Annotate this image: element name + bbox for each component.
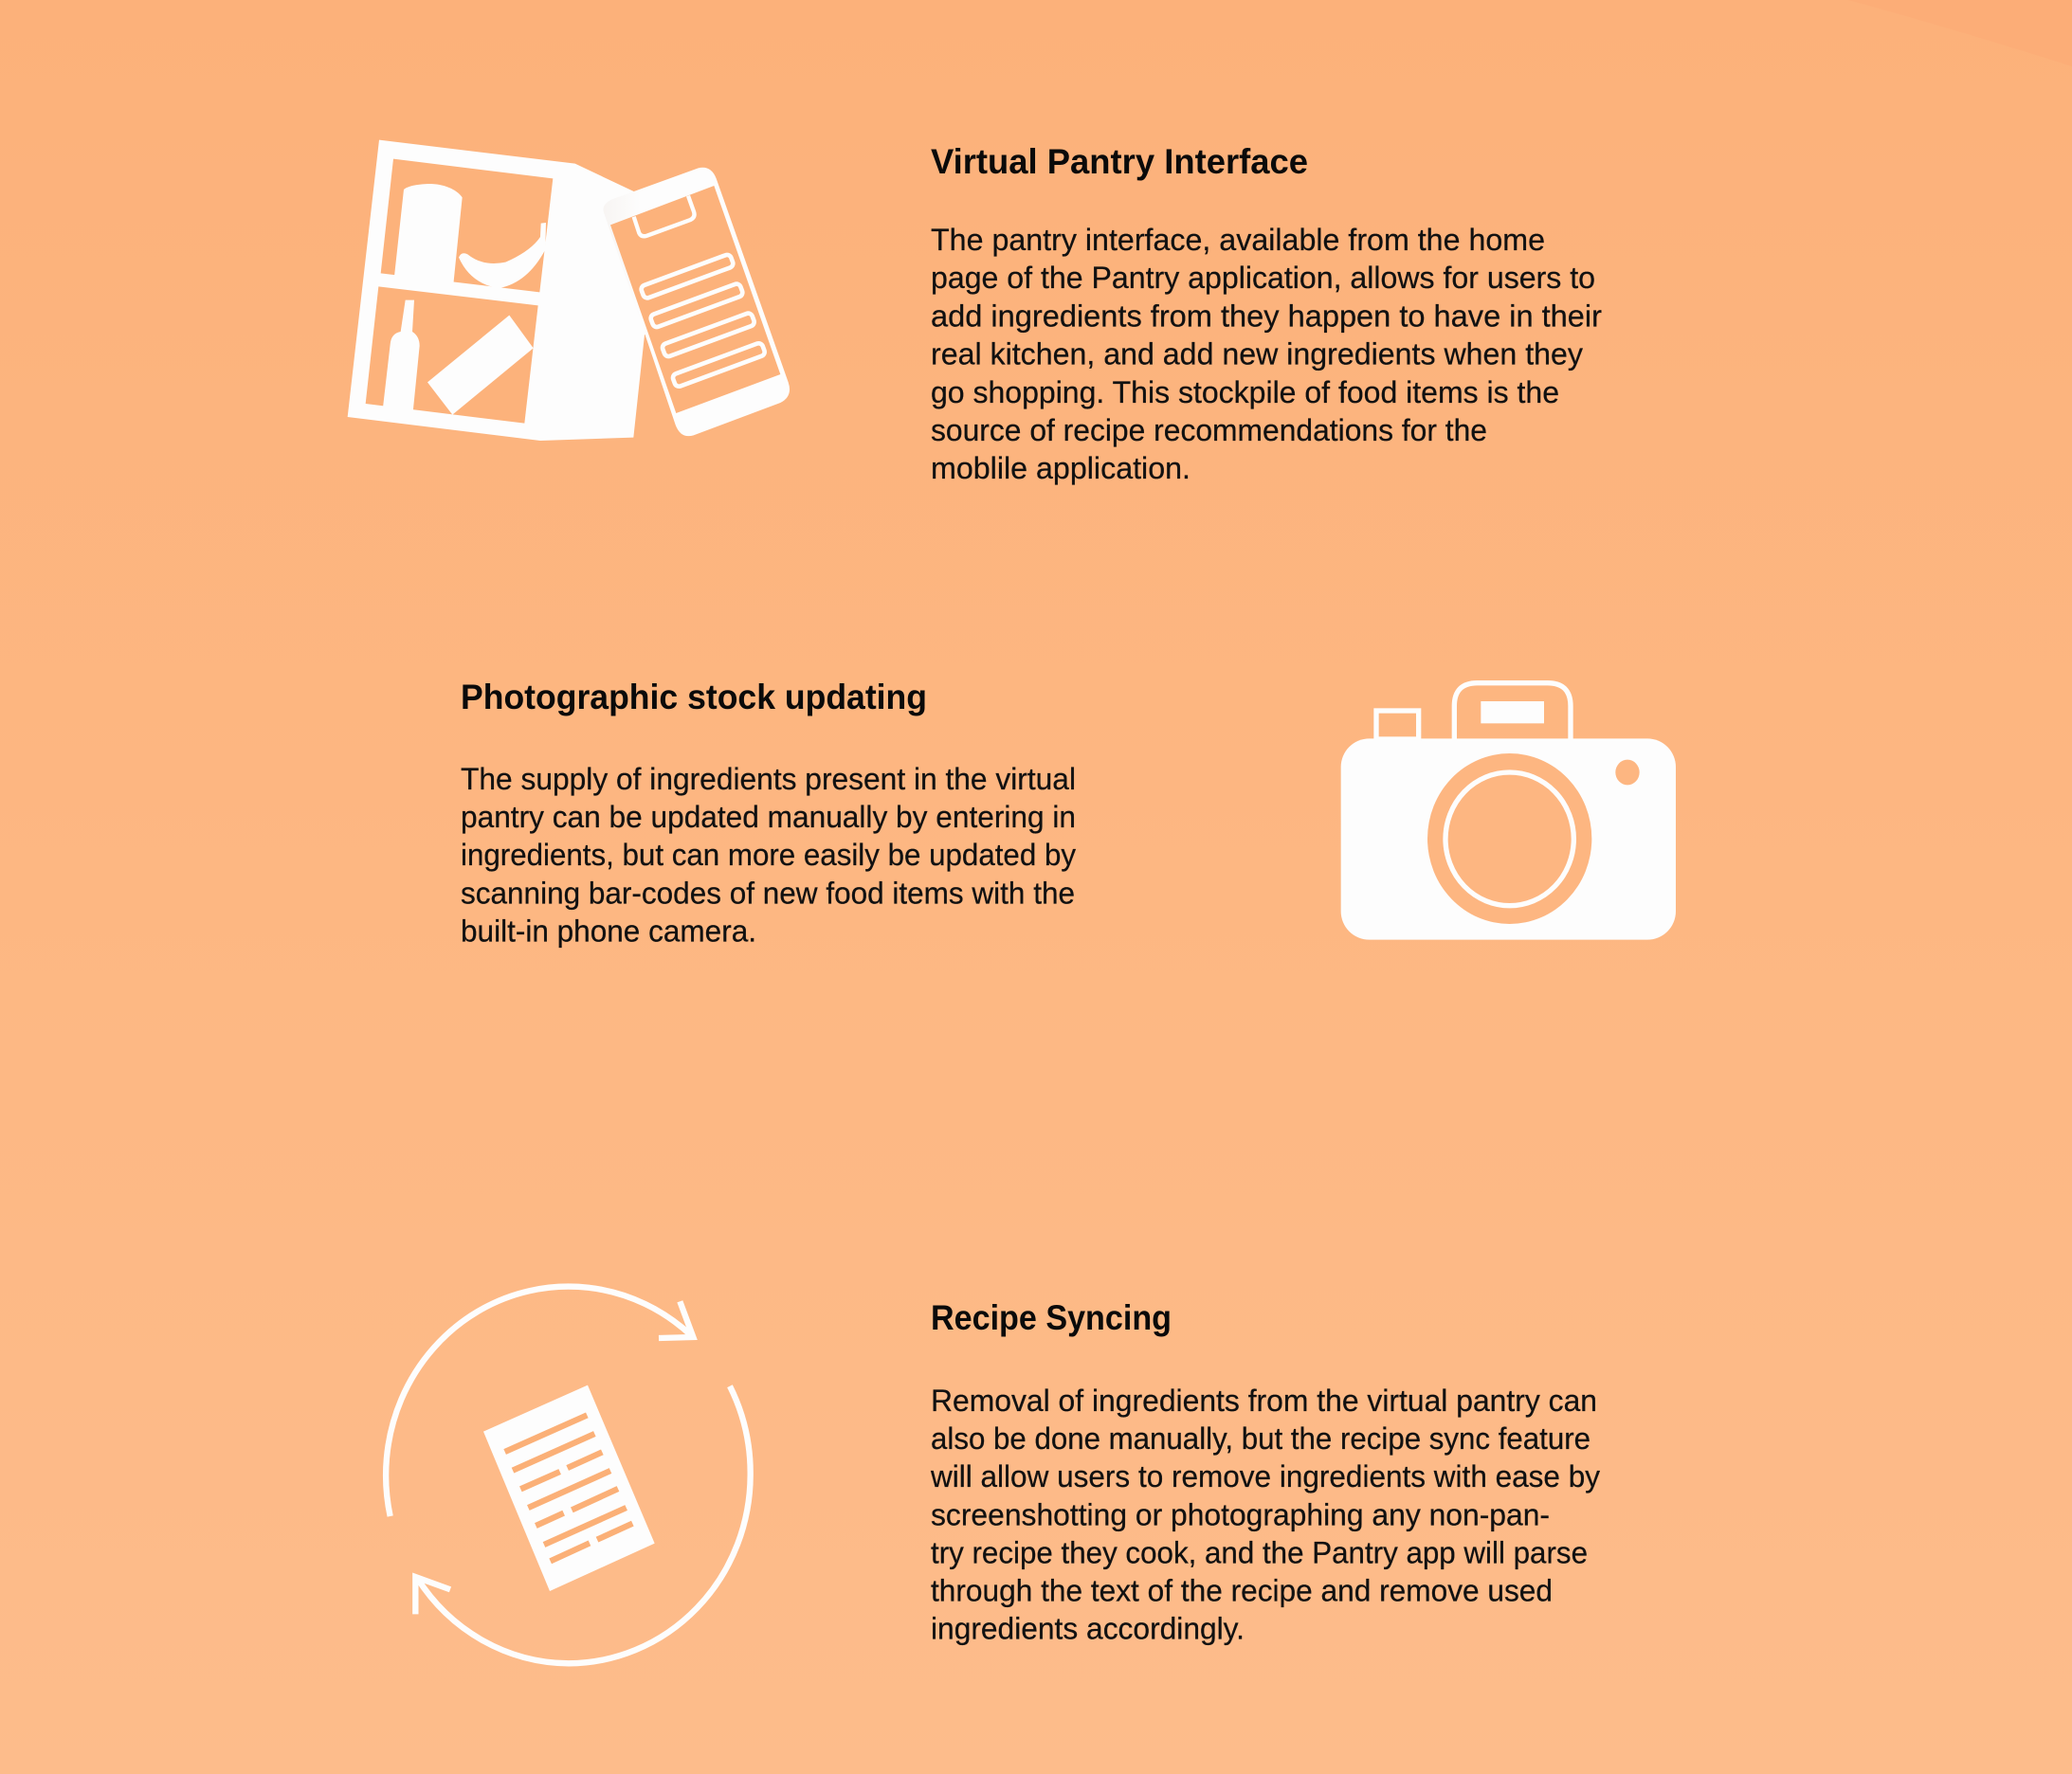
text block: photographic stock updating: pantry can be updated manually by entering in [461, 800, 1076, 834]
can [394, 184, 463, 284]
heading: Photographic stock updating: Photographic stock updating [461, 678, 927, 716]
text block: recipe syncing: ingredients accordingly. [931, 1612, 1245, 1646]
text block: photographic stock updating: scanning bar-codes of new food items with the [461, 876, 1075, 910]
text block: recipe syncing: will allow users to remove ingredients with ease by [930, 1459, 1600, 1493]
heading: Recipe Syncing: Recipe Syncing [931, 1298, 1172, 1337]
upper compartment [381, 159, 553, 292]
search tab [634, 196, 695, 236]
text block: pantry interface: moblile application. [931, 451, 1190, 485]
text block: pantry interface: add ingredients from they happen to have in their [931, 299, 1602, 333]
heading: Virtual Pantry Interface: Virtual Pantry Interface [931, 142, 1308, 181]
indicator dot [1615, 760, 1640, 785]
text block: photographic stock updating: ingredients, but can more easily be updated by [461, 838, 1076, 872]
text block: photographic stock updating: The supply of ingredients present in the virtual [461, 762, 1076, 796]
bottle [383, 300, 420, 412]
sync arrow bottom [415, 1386, 751, 1663]
shelf body [348, 140, 670, 441]
text block: recipe syncing: try recipe they cook, and the Pantry app will parse [931, 1535, 1588, 1569]
text block: pantry interface: The pantry interface, available from the home [931, 223, 1545, 257]
text block: pantry interface: page of the Pantry application, allows for users to [931, 261, 1595, 295]
banana [459, 223, 546, 288]
text block: pantry interface [931, 223, 1602, 485]
icon: recipe sync [386, 1287, 751, 1663]
text block: recipe syncing: Removal of ingredients from the virtual pantry can [931, 1384, 1597, 1418]
text block: photographic stock updating [461, 762, 1076, 948]
list row 3 [662, 312, 755, 357]
corner shape [1848, 0, 2072, 66]
box [427, 316, 534, 415]
list row 2 [649, 282, 744, 328]
text block: pantry interface: source of recipe recommendations for the [931, 413, 1487, 447]
lower compartment [366, 286, 538, 424]
phone [603, 168, 790, 436]
list row 1 [640, 254, 735, 299]
text block: photographic stock updating: built-in phone camera. [461, 914, 756, 948]
lens [1445, 772, 1573, 906]
text block: recipe syncing [930, 1384, 1600, 1646]
recipe document [483, 1385, 655, 1591]
sync arrow top [386, 1287, 693, 1516]
text block: recipe syncing: also be done manually, but the recipe sync feature [931, 1421, 1590, 1456]
icon: pantry shelf and phone [348, 140, 790, 441]
lens ring [1427, 753, 1591, 924]
phone screen [610, 186, 780, 413]
camera body [1341, 738, 1676, 940]
flash housing [1454, 683, 1571, 739]
text block: pantry interface: real kitchen, and add new ingredients when they [931, 337, 1583, 371]
list row 4 [672, 342, 766, 388]
text block: recipe syncing: screenshotting or photographing any non-pan- [931, 1497, 1550, 1531]
phone body [603, 168, 790, 436]
icon: camera [1341, 683, 1676, 940]
viewfinder [1376, 711, 1419, 739]
flash window [1481, 701, 1544, 723]
text block: pantry interface: go shopping. This stockpile of food items is the [931, 375, 1559, 409]
text block: recipe syncing: through the text of the recipe and remove used [931, 1573, 1553, 1607]
